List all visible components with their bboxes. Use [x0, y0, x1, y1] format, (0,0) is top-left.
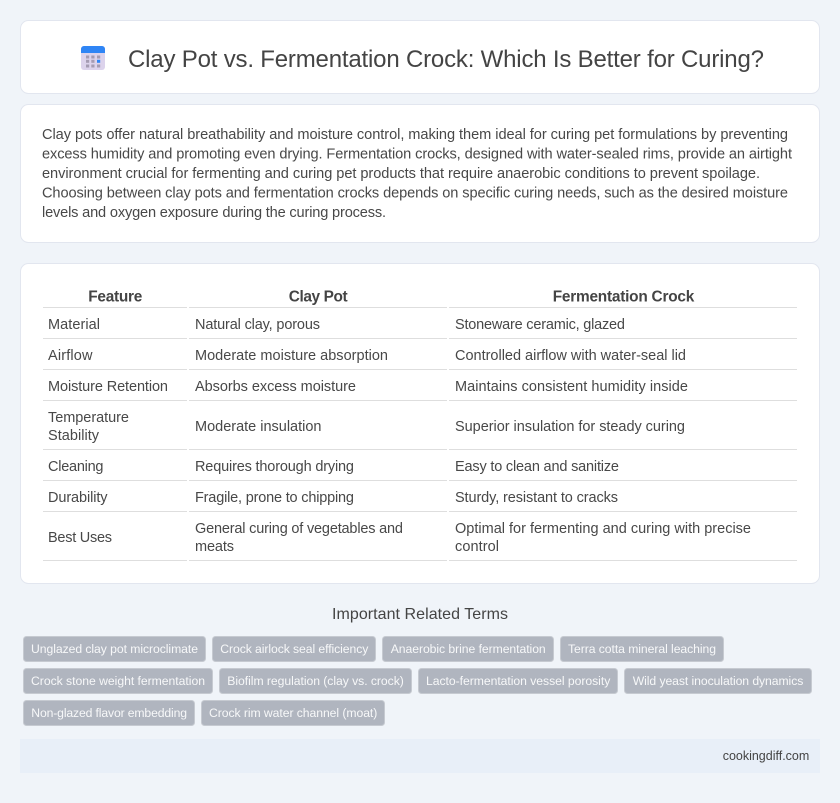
table row: moisture retention [43, 379, 797, 401]
table row: durability: Fragile, prone to chipping [195, 490, 354, 506]
table header row: Clay Pot [289, 289, 348, 306]
table row: durability: Durability [48, 490, 108, 506]
table row: moisture retention: Moisture Retention [48, 379, 168, 395]
table row: material: Material [48, 317, 100, 333]
table row: material: Stoneware ceramic, glazed [455, 317, 625, 333]
tag: Biofilm regulation (clay vs. crock) [227, 674, 404, 688]
table row: airflow: Controlled airflow with water-seal lid [455, 348, 686, 364]
tag: Non-glazed flavor embedding [31, 706, 187, 720]
tag [624, 668, 812, 694]
table row: cleaning: Requires thorough drying [195, 459, 354, 475]
tag: Wild yeast inoculation dynamics [633, 674, 803, 688]
tag [24, 700, 194, 726]
tag [212, 636, 376, 662]
table row: moisture retention: Maintains consistent humidity inside [455, 379, 688, 395]
table row: durability: Sturdy, resistant to cracks [455, 490, 618, 506]
tag: Anaerobic brine fermentation [391, 642, 546, 656]
tag [202, 700, 384, 726]
table row: best uses: General curing of vegetables and [195, 521, 403, 537]
panel: introduction [20, 104, 820, 242]
heading: important related terms: Important Related Terms [332, 606, 508, 623]
tag [220, 668, 412, 694]
tag [24, 668, 212, 694]
tag: Terra cotta mineral leaching [568, 642, 716, 656]
tag [560, 636, 724, 662]
table header row: Fermentation Crock [553, 289, 695, 306]
tag: Crock airlock seal efficiency [220, 642, 369, 656]
text block: introduction paragraph: Choosing between clay pots and fermentation crocks depends on specific curing needs, such as the desired moisture [42, 185, 788, 201]
table row: best uses: control [455, 539, 499, 555]
panel: title header [20, 20, 820, 94]
footer [20, 739, 820, 773]
table row: best uses: Optimal for fermenting and curing with precise [455, 521, 751, 537]
table row: airflow: Moderate moisture absorption [195, 348, 388, 364]
table row: temperature stability [43, 410, 797, 450]
table row: temperature stability: Temperature [48, 410, 129, 426]
tag: Unglazed clay pot microclimate [31, 642, 198, 656]
table row: durability [43, 490, 797, 512]
table row: best uses: Best Uses [48, 530, 112, 546]
table row: material [43, 317, 797, 339]
tag [418, 668, 618, 694]
table header row: Feature [88, 289, 143, 306]
title: Clay Pot vs. Fermentation Crock: Which Is Better for Curing? [128, 46, 764, 73]
table row: best uses [43, 521, 797, 561]
table row: temperature stability: Superior insulation for steady curing [455, 419, 685, 435]
table row: airflow [43, 348, 797, 370]
tag: Crock rim water channel (moat) [209, 706, 377, 720]
text block: introduction paragraph [42, 127, 792, 221]
table row: moisture retention: Absorbs excess moisture [195, 379, 356, 395]
table row: best uses: meats [195, 539, 234, 555]
tag: Crock stone weight fermentation [31, 674, 205, 688]
table row: material: Natural clay, porous [195, 317, 320, 333]
tag list: related terms [24, 636, 812, 726]
tag [24, 636, 206, 662]
tag [382, 636, 554, 662]
icon: calendar [81, 46, 105, 70]
text block: introduction paragraph: Clay pots offer natural breathability and moisture control, making them ideal for curing pet formulations by preventing [42, 127, 788, 143]
tag: Lacto-fermentation vessel porosity [426, 674, 611, 688]
table row: cleaning [43, 459, 797, 481]
text block: introduction paragraph: environment crucial for fermenting and curing pet products that require anaerobic conditions to prevent spoilage. [42, 166, 760, 182]
table header row [43, 289, 797, 308]
table row: cleaning: Cleaning [48, 459, 104, 475]
text block: introduction paragraph: excess humidity and promoting even drying. Fermentation crocks, designed with water-sealed rims, provide an airtight [42, 146, 792, 162]
table row: temperature stability: Stability [48, 428, 100, 444]
footer: cookingdiff.com [723, 749, 809, 763]
table row: temperature stability: Moderate insulation [195, 419, 322, 435]
text block: introduction paragraph: levels and oxygen exposure during the curing process. [42, 205, 386, 221]
table row: airflow: Airflow [48, 348, 93, 364]
panel: comparison table [20, 264, 820, 584]
table row: cleaning: Easy to clean and sanitize [455, 459, 619, 475]
